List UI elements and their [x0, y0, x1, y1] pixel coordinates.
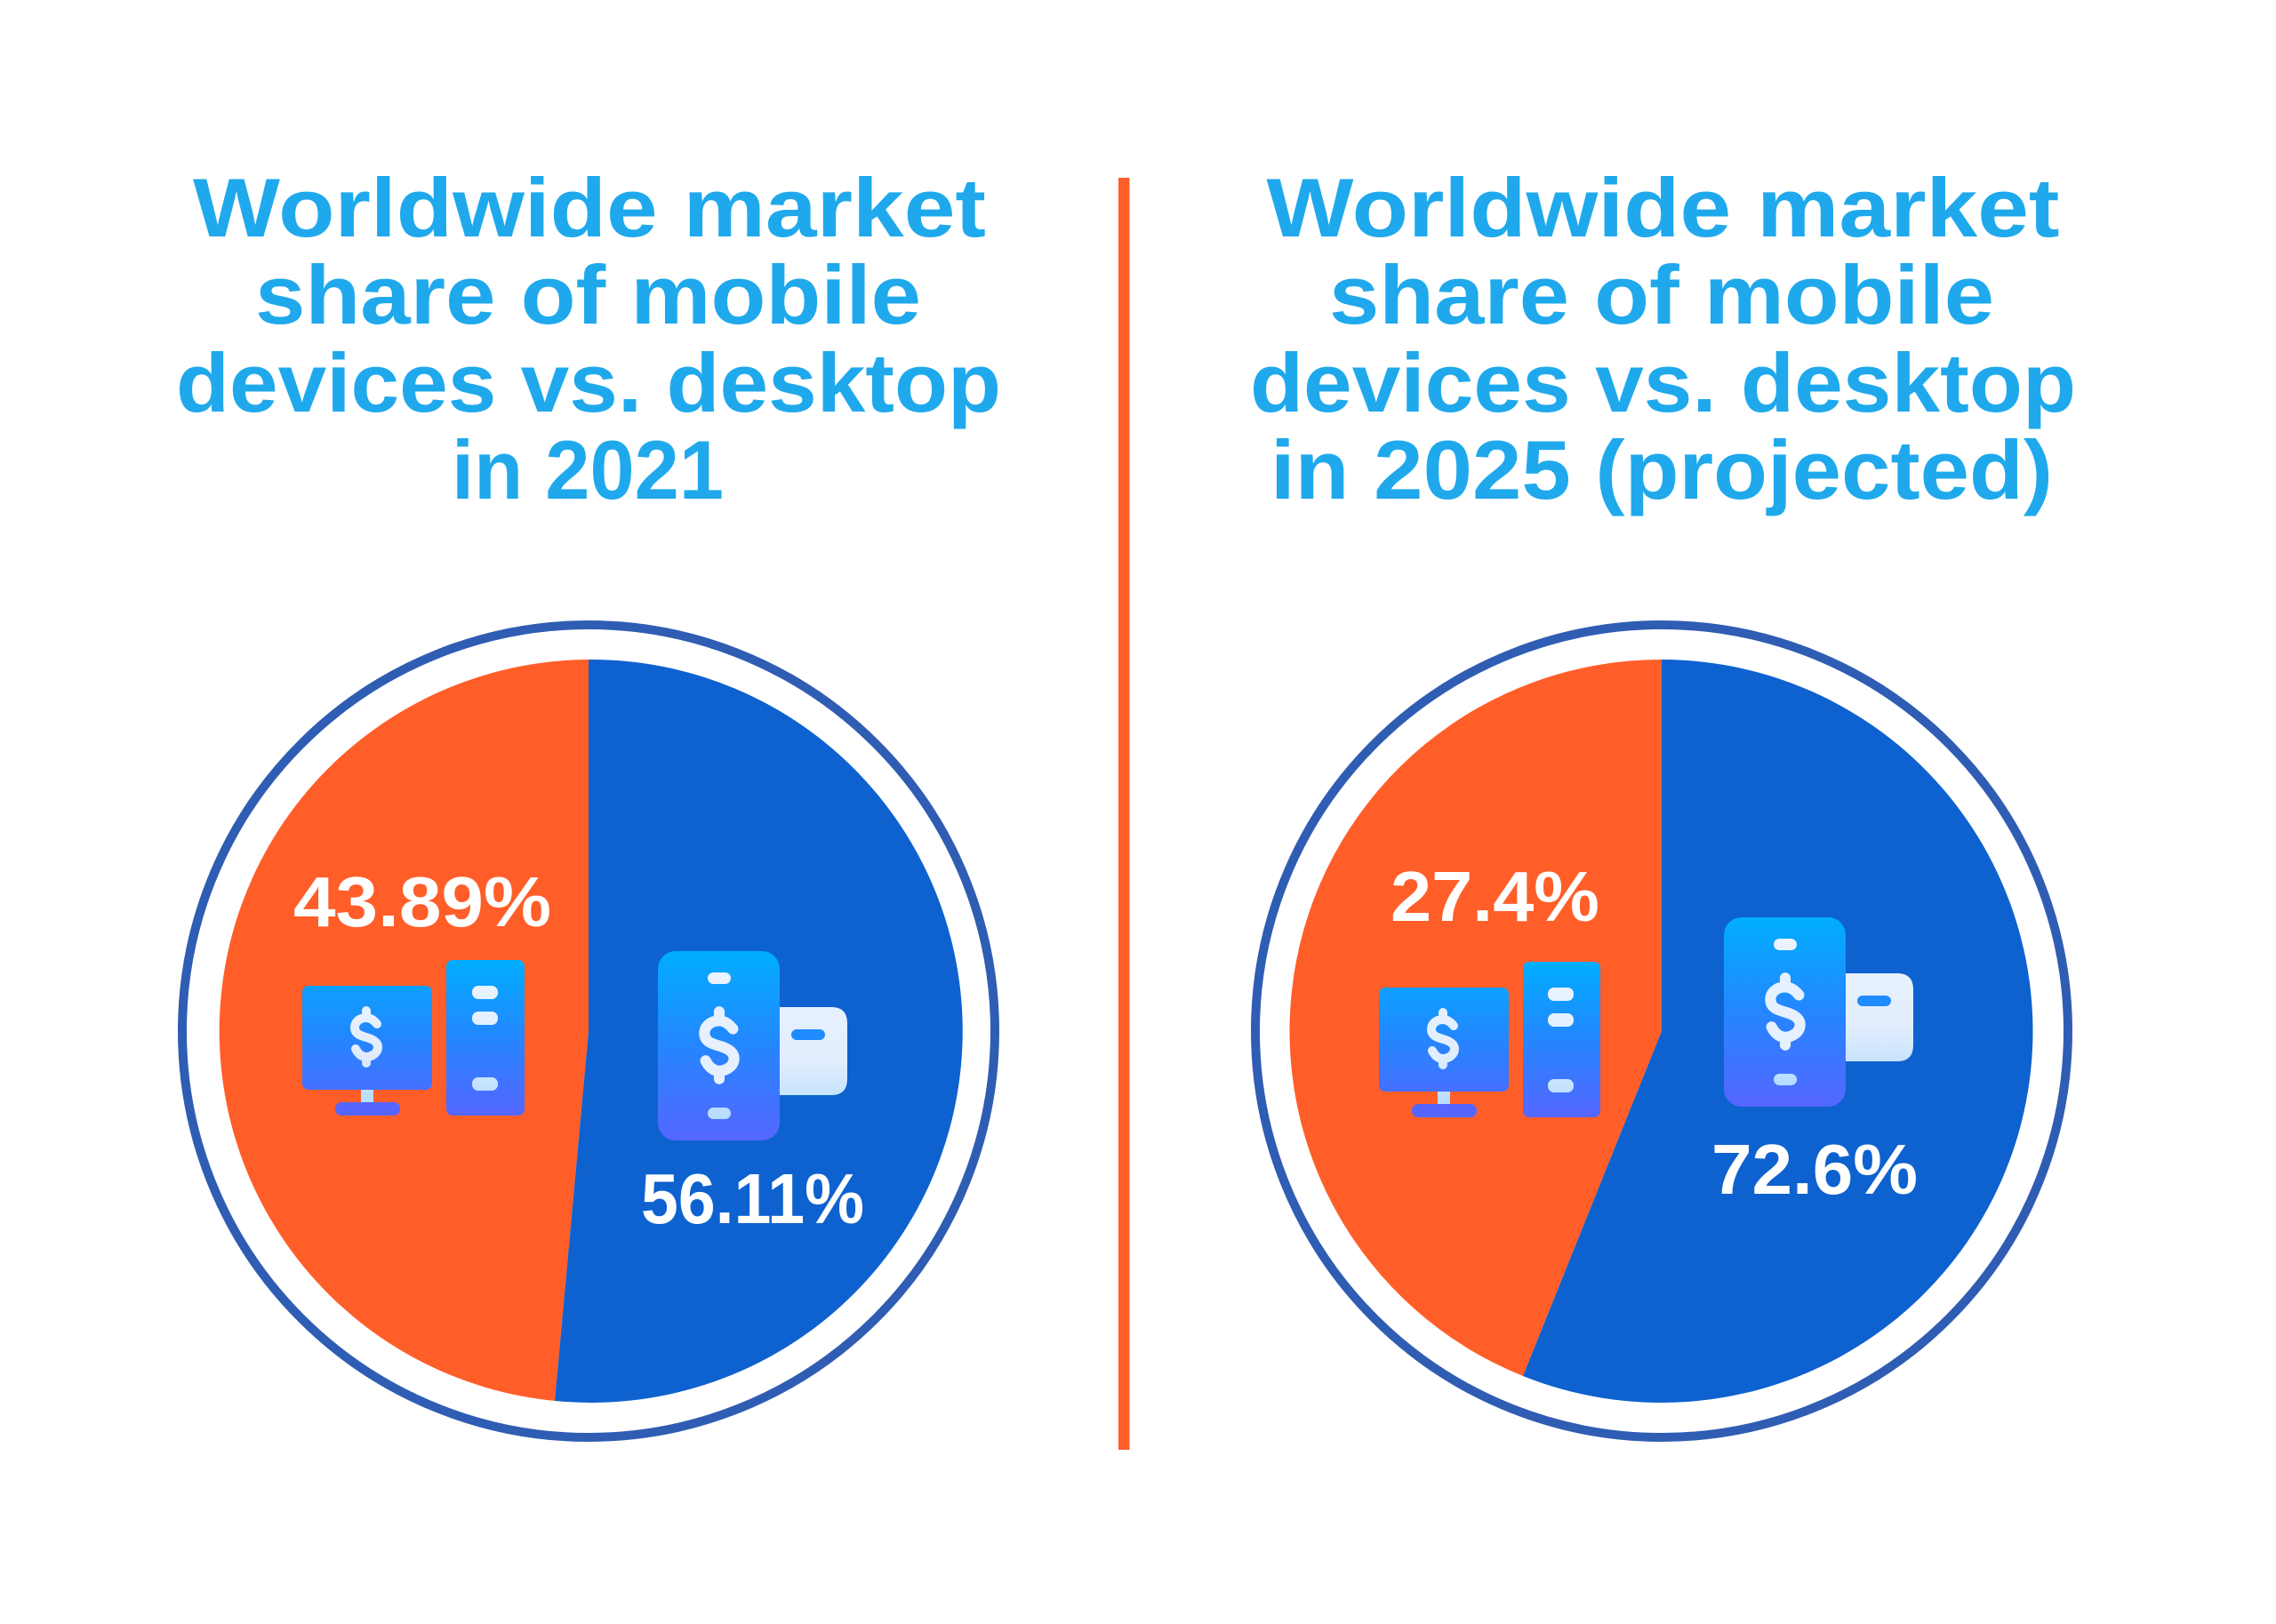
mobile slice 72.6%: [1523, 660, 2032, 1403]
left heading: [176, 161, 1001, 516]
right heading: in 2025 (projected): [1270, 423, 2053, 516]
right heading: [1250, 161, 2076, 516]
label: 43.89%: 43.89%: [293, 862, 551, 941]
desktop slice 27.4%: [1289, 660, 1662, 1376]
left heading: in 2021: [452, 423, 724, 516]
right heading: devices vs. desktop: [1250, 336, 2076, 429]
icon: desktop computer 2021: [302, 960, 525, 1116]
label: 56.11%: 56.11%: [641, 1159, 864, 1238]
desktop slice 43.89%: [220, 660, 589, 1401]
label: 72.6%: 72.6%: [1711, 1130, 1918, 1209]
left heading: Worldwide market: [193, 161, 986, 254]
right heading: share of mobile: [1329, 248, 1994, 341]
left pie chart 2021: [182, 625, 995, 1437]
right pie chart 2025: [1255, 625, 2068, 1437]
icon: mobile phone with card 2021: [658, 951, 847, 1140]
left heading: devices vs. desktop: [176, 336, 1001, 429]
mobile slice 56.11%: [555, 660, 963, 1403]
label: 27.4%: 27.4%: [1390, 857, 1599, 936]
center divider: [1118, 178, 1129, 1450]
right heading: Worldwide market: [1266, 161, 2059, 254]
icon: mobile phone with card 2025: [1724, 917, 1913, 1107]
left heading: share of mobile: [255, 248, 921, 341]
icon: desktop computer 2025: [1379, 962, 1600, 1117]
